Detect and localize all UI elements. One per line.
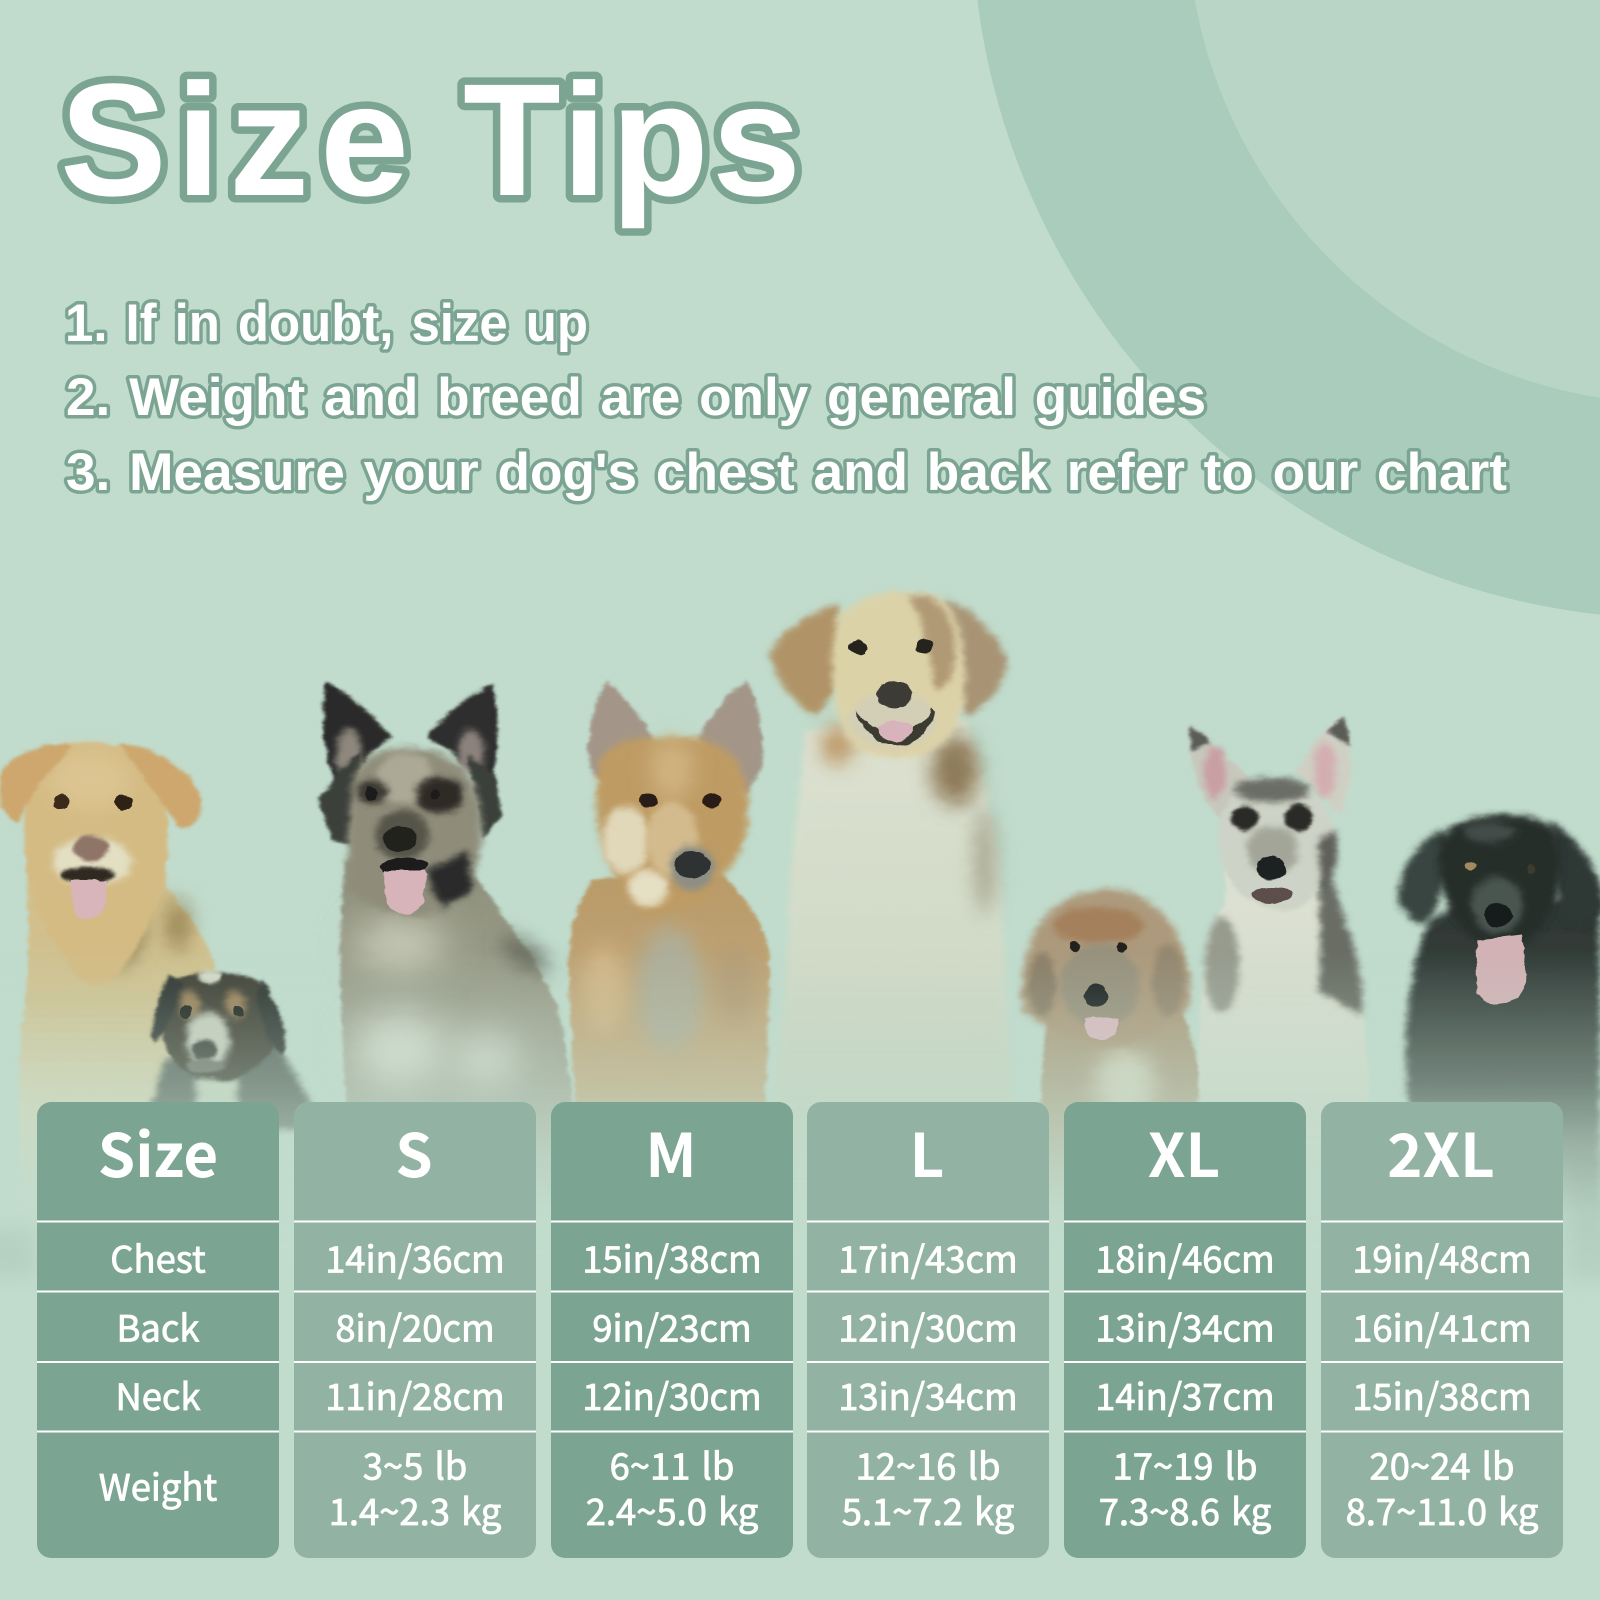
dog: tricolor puppy bbox=[148, 970, 322, 1130]
tip 1: 1. If in doubt, size up bbox=[65, 294, 588, 353]
column: XL: 14in/37cm bbox=[1095, 1369, 1275, 1421]
column: M bbox=[551, 1102, 793, 1558]
column: XL bbox=[1064, 1102, 1306, 1558]
dog: black retriever bbox=[1398, 815, 1600, 1260]
tip 2: 2. Weight and breed are only general guides bbox=[66, 368, 1206, 427]
column: M: 15in/38cm bbox=[582, 1232, 762, 1284]
column: XL: XL bbox=[1148, 1108, 1220, 1195]
column: 2XL bbox=[1321, 1102, 1563, 1558]
column: S: 8in/20cm bbox=[335, 1300, 495, 1352]
dog: merle husky bbox=[1190, 717, 1369, 1260]
column: XL: 17~19 lb bbox=[1113, 1438, 1257, 1490]
column: S: S bbox=[395, 1108, 433, 1195]
column: S: 3~5 lb bbox=[363, 1438, 467, 1490]
column: L: 17in/43cm bbox=[838, 1232, 1018, 1284]
column: XL: 13in/34cm bbox=[1095, 1300, 1275, 1352]
tips list bbox=[65, 294, 1507, 502]
column: M: 6~11 lb bbox=[610, 1438, 734, 1490]
dog: golden retriever bbox=[0, 739, 216, 1136]
column: L: 13in/34cm bbox=[838, 1369, 1018, 1421]
dogs illustration bbox=[0, 592, 1600, 1260]
size chart table bbox=[37, 1102, 1563, 1558]
column: labels: Weight bbox=[99, 1460, 218, 1512]
column: L: 12~16 lb bbox=[856, 1438, 1000, 1490]
column: XL: 7.3~8.6 kg bbox=[1099, 1484, 1272, 1536]
column: S bbox=[294, 1102, 536, 1558]
column: M: M bbox=[645, 1108, 697, 1195]
column: 2XL: 20~24 lb bbox=[1370, 1438, 1514, 1490]
column: 2XL: 2XL bbox=[1387, 1108, 1495, 1195]
tip 3: 3. Measure your dog's chest and back refer to our chart bbox=[66, 443, 1507, 502]
column: labels: Chest bbox=[110, 1232, 206, 1284]
dog: grey shepherd bbox=[318, 682, 576, 1260]
dog: large white and brown bbox=[764, 588, 1012, 1044]
column: S: 1.4~2.3 kg bbox=[329, 1484, 502, 1536]
column: L bbox=[807, 1102, 1049, 1558]
title: Size Tips bbox=[60, 50, 801, 229]
column: M: 9in/23cm bbox=[592, 1300, 752, 1352]
fog fade over dogs bbox=[0, 950, 1600, 1260]
column: 2XL: 16in/41cm bbox=[1352, 1300, 1532, 1352]
dog: shaggy terrier bbox=[1021, 889, 1208, 1260]
column: 2XL: 8.7~11.0 kg bbox=[1346, 1484, 1539, 1536]
column: L: 12in/30cm bbox=[838, 1300, 1018, 1352]
decorative ring top right bbox=[972, 0, 1600, 619]
column: labels: Back bbox=[116, 1300, 200, 1352]
faint ground shadow bbox=[0, 1150, 1600, 1280]
column: labels: Size bbox=[98, 1108, 218, 1195]
dog: tan shepherd bbox=[565, 680, 772, 1102]
column: 2XL: 19in/48cm bbox=[1352, 1232, 1532, 1284]
column: XL: 18in/46cm bbox=[1095, 1232, 1275, 1284]
column: M: 12in/30cm bbox=[582, 1369, 762, 1421]
column: L: L bbox=[910, 1108, 944, 1195]
column: S: 14in/36cm bbox=[325, 1232, 505, 1284]
column: 2XL: 15in/38cm bbox=[1352, 1369, 1532, 1421]
column: L: 5.1~7.2 kg bbox=[842, 1484, 1015, 1536]
column: labels: Neck bbox=[115, 1369, 201, 1421]
column: S: 11in/28cm bbox=[325, 1369, 505, 1421]
column: M: 2.4~5.0 kg bbox=[586, 1484, 759, 1536]
column: labels bbox=[37, 1102, 279, 1558]
